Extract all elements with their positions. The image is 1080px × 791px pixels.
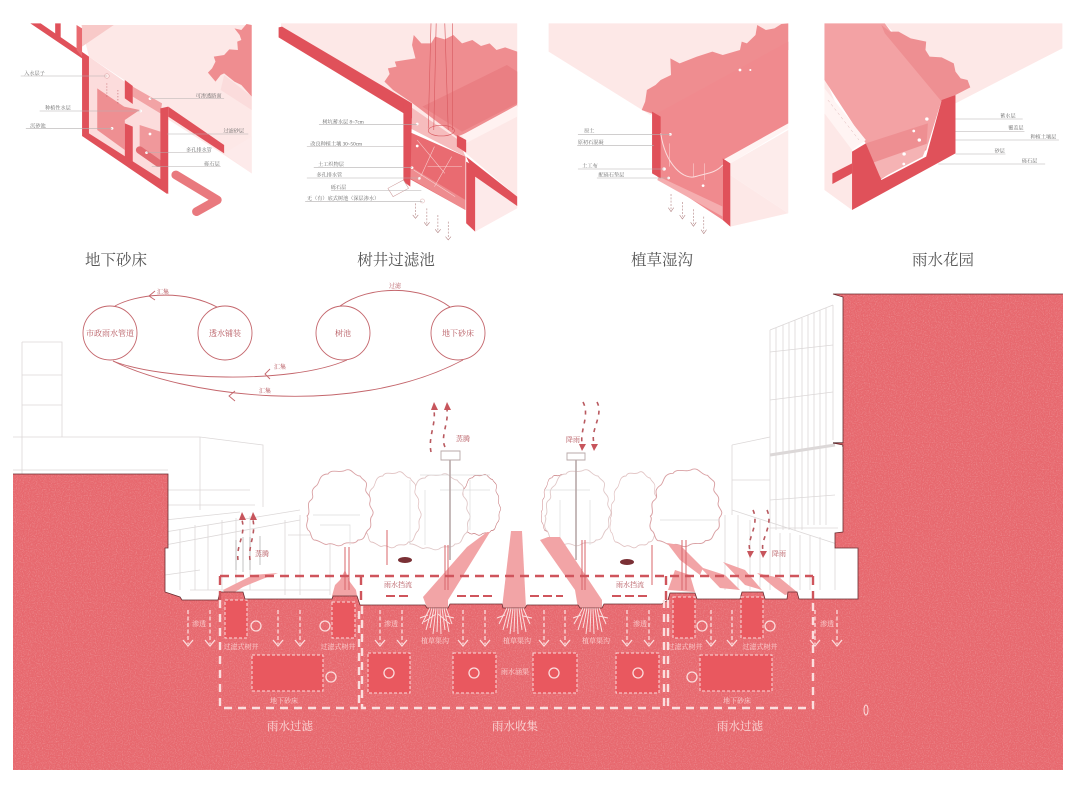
zone: 雨水过滤 left: 地下砂床: [270, 696, 298, 705]
arrows: evapotranspiration upper left: [430, 402, 470, 452]
zone: 雨水收集: 植草渠沟: [421, 636, 449, 645]
arrow: 汇集 bottom: [113, 360, 463, 401]
arrows: rainfall upper right: 降雨: [566, 435, 580, 444]
label: 雨水挡流 right: 雨水挡流: [616, 580, 644, 589]
zone: 雨水收集: 渗透: [384, 619, 398, 628]
rain culvert: [368, 653, 410, 693]
street trees right: [541, 469, 722, 548]
panel: 地下砂床 axonometric: 砾石层: [204, 161, 221, 168]
panel: 植草湿沟 axonometric: [549, 23, 788, 234]
ground mass: [13, 294, 1063, 770]
panel: 雨水花园 axonometric: 蓄水层: [1000, 112, 1017, 119]
arrow: 汇集 top-left: [115, 288, 217, 307]
tree filter well: [673, 597, 695, 638]
zone title: 雨水过滤 right: 雨水过滤: [717, 719, 763, 733]
arrow: 汇集 middle: [113, 360, 347, 379]
arrows: rainfall lower right: [747, 510, 786, 558]
zone title: 雨水收集: 雨水收集: [492, 719, 538, 733]
rain culvert: [533, 653, 577, 693]
arrows: rainfall lower right: 降雨: [772, 549, 786, 558]
panel: 树井过滤池 axonometric: [279, 23, 517, 240]
panel: 树井过滤池 axonometric: 无（有）底式树池（深层渗水）: [307, 195, 379, 202]
tree filter well: [225, 600, 247, 638]
panel: 植草湿沟 axonometric: 配砾石垫层: [598, 172, 625, 179]
tree filter well: [741, 597, 763, 638]
node: 树池: [316, 306, 370, 360]
zone: 雨水过滤 right: [668, 597, 834, 705]
panel: 植草湿沟 axonometric: 原初石混凝: [578, 139, 604, 146]
tree filter well: [332, 602, 355, 638]
rain culvert: [453, 653, 496, 693]
panel: 雨水花园 axonometric: [823, 23, 1062, 210]
panel: 雨水花园 axonometric: 砂层: [994, 147, 1006, 154]
street lamps: [441, 451, 585, 560]
diagram: stormwater cycle: [83, 282, 485, 401]
panel: 树井过滤池 axonometric: 树坑蓄水层 8~7cm: [322, 118, 364, 125]
panel: 植草湿沟 axonometric: 土工布: [582, 162, 598, 169]
zone: 雨水收集: 雨水涵渠: [501, 667, 529, 676]
arrow: 汇集 middle: 汇集: [274, 363, 286, 371]
rain culvert: [616, 653, 659, 693]
road flow arrows: [386, 595, 648, 597]
zone: 雨水过滤 right: 渗透: [820, 619, 834, 628]
panel: 地下砂床 axonometric: 入水层子: [24, 70, 45, 77]
arrows: evapotranspiration lower left: 蒸腾: [255, 549, 269, 558]
sand bed: [252, 655, 323, 691]
tree trunks and cars: [345, 530, 686, 590]
title: 雨水花园: 雨水花园: [912, 250, 974, 269]
panel: 树井过滤池 axonometric: 土工织物层: [318, 161, 345, 168]
arrows: evapotranspiration upper left: 蒸腾: [456, 434, 470, 443]
arrow: 过滤 top-right: 过滤: [389, 282, 402, 290]
street trees left: [307, 470, 501, 550]
zone: 雨水收集: 植草渠沟: [503, 636, 531, 645]
zone: 雨水过滤 right: 过滤式树井: [668, 642, 702, 651]
panel: 地下砂床 axonometric: 沉砂池: [30, 122, 46, 129]
panel: 树井过滤池 axonometric: 砾石层: [331, 184, 347, 191]
zone: 雨水过滤 left: 过滤式树井: [320, 642, 356, 651]
node: 地下砂床: 地下砂床: [442, 328, 474, 338]
arrow: 过滤 top-right: [340, 282, 450, 307]
panel: 雨水花园 axonometric: 砾石层: [1022, 157, 1038, 164]
panel: 树井过滤池 axonometric: 改良种植土壤 30~50cm: [310, 141, 362, 148]
dashed zone boundaries: [220, 576, 813, 708]
background buildings: left: [13, 342, 330, 595]
title: 植草湿沟: 植草湿沟: [631, 250, 693, 269]
zone: 雨水过滤 right: 地下砂床: [723, 696, 751, 705]
panel: 地下砂床 axonometric: 多孔排水管: [186, 147, 212, 154]
panel: 地下砂床 axonometric: 可渗透路面: [196, 93, 222, 100]
title: 地下砂床: 地下砂床: [85, 250, 147, 269]
node: 树池: 树池: [335, 328, 351, 338]
zone: 雨水过滤 left: 过滤式树井: [224, 642, 258, 651]
panel: 雨水花园 axonometric: 覆盖层: [1008, 125, 1025, 132]
plant roots under swales: [420, 608, 608, 634]
infiltration arrows: [183, 610, 842, 646]
panel: 植草湿沟 axonometric: 原土: [584, 128, 594, 135]
panel: 地下砂床 axonometric: 种植性水层: [45, 105, 72, 112]
node: 地下砂床: [431, 306, 485, 360]
node: 市政雨水管道: [83, 306, 137, 360]
zone: 雨水收集: 植草渠沟: [582, 636, 610, 645]
panel: 地下砂床 axonometric: 过滤砂层: [223, 128, 245, 135]
arrow: 汇集 bottom: 汇集: [259, 387, 271, 395]
label: 雨水挡流 left: 雨水挡流: [384, 580, 412, 589]
background buildings: right: [725, 305, 843, 590]
node: 透水铺装: [198, 306, 252, 360]
panel: 树井过滤池 axonometric: 多孔排水管: [316, 172, 342, 179]
panel: 地下砂床 axonometric: [21, 23, 252, 212]
zone title: 雨水过滤 left: 雨水过滤: [267, 719, 313, 733]
node: 市政雨水管道: 市政雨水管道: [86, 328, 134, 338]
title: 树井过滤池: 树井过滤池: [357, 251, 435, 269]
zone: 雨水过滤 left: [192, 600, 356, 705]
zone: 雨水收集: 渗透: [633, 619, 647, 628]
arrows: evapotranspiration lower left: [238, 512, 269, 560]
ground texture: [13, 294, 1063, 770]
zone: 雨水过滤 right: 过滤式树井: [742, 642, 778, 651]
zone: 雨水收集: [368, 619, 659, 693]
ground surface line: [13, 294, 1063, 608]
arrows: rainfall upper right: [566, 402, 599, 451]
zone: 雨水过滤 left: 渗透: [192, 619, 206, 628]
panel: 雨水花园 axonometric: 种植土壤层: [1030, 133, 1057, 140]
road surface with pink flow streaks: [223, 531, 797, 608]
arrow: 汇集 top-left: 汇集: [157, 288, 169, 296]
sand bed: [700, 655, 772, 691]
node: 透水铺装: 透水铺装: [209, 328, 241, 338]
small circle mark: [864, 705, 868, 715]
